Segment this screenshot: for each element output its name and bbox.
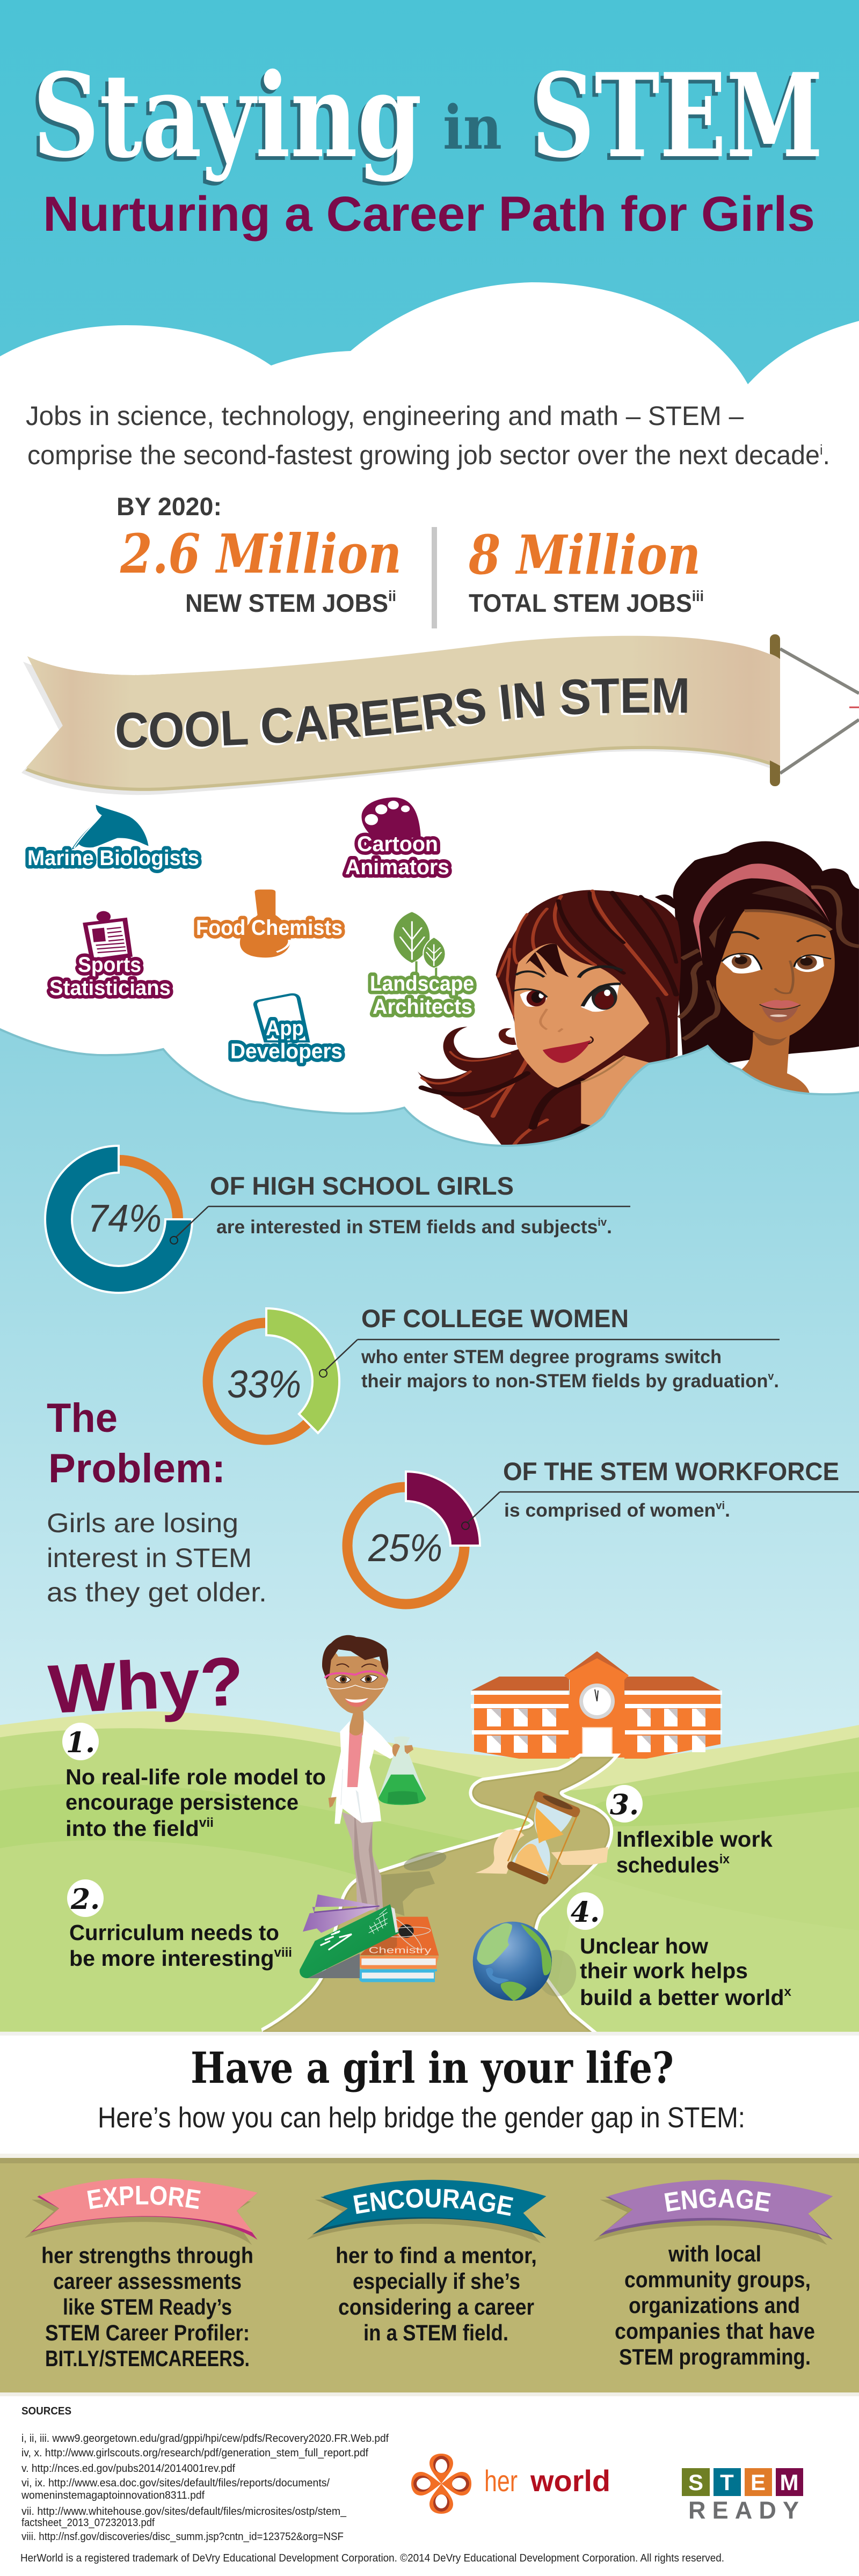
reason 3: 3. bbox=[610, 1789, 639, 1821]
reason 2: viii bbox=[274, 1945, 292, 1960]
donut chart 25: 25% bbox=[368, 1527, 442, 1570]
ribbon: explore bbox=[25, 2178, 258, 2245]
explore text: her strengths through bbox=[41, 2243, 253, 2268]
ribbon: engage bbox=[594, 2180, 833, 2245]
ribbon: encourage: ENCOURAGE bbox=[353, 2189, 513, 2216]
engage text: companies that have bbox=[615, 2318, 815, 2344]
reason 1: vii bbox=[199, 1816, 214, 1830]
ribbon: encourage bbox=[307, 2180, 547, 2243]
illustration: two girls bbox=[418, 841, 859, 1148]
label: landscape architects: Architects bbox=[373, 995, 472, 1019]
illustration: books and paper plane: Chemistry bbox=[369, 1945, 432, 1955]
stat: 33 percent bbox=[208, 1304, 780, 1440]
stat: 33 percent: OF COLLEGE WOMEN bbox=[361, 1304, 629, 1333]
reason 2: 2. bbox=[70, 1883, 100, 1916]
stat: 74 percent bbox=[45, 1146, 630, 1293]
icon: film reel bbox=[361, 797, 421, 843]
icon: globe bbox=[473, 1922, 552, 2001]
engage text: organizations and bbox=[629, 2293, 800, 2318]
icon: phone bbox=[255, 994, 308, 1041]
stat: 74 percent: are interested in STEM fields and subjects bbox=[216, 1217, 593, 1238]
explore text: STEM Career Profiler: bbox=[45, 2320, 250, 2345]
logo: her world: world bbox=[530, 2464, 610, 2498]
title: in bbox=[443, 93, 502, 163]
job stats: 8 Million bbox=[468, 523, 701, 587]
reason 3: Inflexible work bbox=[616, 1827, 773, 1851]
logo: stem ready: E bbox=[751, 2470, 766, 2495]
label: landscape architects: Landscape bbox=[370, 972, 474, 996]
heading: why: Why? bbox=[47, 1643, 245, 1728]
donut chart 25 bbox=[347, 1472, 859, 1604]
explore text: career assessments bbox=[53, 2268, 242, 2294]
engage text: with local bbox=[668, 2241, 761, 2266]
call to action panel bbox=[0, 2032, 859, 2394]
label: cartoon animators: Animators bbox=[345, 855, 449, 879]
ribbon: explore: EXPLORE bbox=[87, 2186, 201, 2209]
sources: vii. http://www.whitehouse.gov/sites/default/files/microsites/ostp/stem_ bbox=[21, 2506, 347, 2518]
heading: the problem bbox=[47, 1395, 225, 1491]
job stats: BY 2020: bbox=[117, 492, 222, 521]
ribbon: engage: ENGAGE bbox=[665, 2189, 771, 2212]
reason 2: be more interesting bbox=[69, 1946, 273, 1971]
encourage text: considering a career bbox=[338, 2294, 534, 2319]
sources: iv, x. http://www.girlscouts.org/research/pdf/generation_stem_full_report.pdf bbox=[21, 2447, 368, 2459]
stat: 74 percent: . bbox=[607, 1217, 612, 1238]
job stats: ii bbox=[388, 588, 396, 604]
sources bbox=[21, 2405, 389, 2543]
heading: the problem: The bbox=[47, 1395, 118, 1441]
encourage text: in a STEM field. bbox=[363, 2320, 508, 2345]
reason 4: 4. bbox=[571, 1896, 600, 1929]
reason 4: build a better world bbox=[580, 1985, 783, 2010]
encourage text: her to find a mentor, bbox=[336, 2243, 537, 2268]
clock bbox=[579, 1684, 615, 1719]
engage text bbox=[615, 2241, 815, 2369]
job stats: 2.6 Million bbox=[120, 522, 402, 586]
intro text: comprise the second-fastest growing job sector over the next decade bbox=[27, 440, 847, 470]
job stats bbox=[117, 492, 704, 628]
problem statement: Girls are losing bbox=[47, 1508, 238, 1538]
problem statement bbox=[47, 1508, 267, 1607]
stat: 25 percent: is comprised of women bbox=[504, 1500, 713, 1521]
stat: 33 percent: their majors to non-STEM fields by graduation bbox=[361, 1371, 774, 1392]
problem statement: as they get older. bbox=[47, 1577, 267, 1607]
sources: factsheet_2013_07232013.pdf bbox=[21, 2517, 155, 2529]
reason 3: schedules bbox=[616, 1853, 724, 1877]
title bbox=[33, 48, 823, 184]
stat: 25 percent: OF THE STEM WORKFORCE bbox=[503, 1457, 839, 1485]
job stats: TOTAL STEM JOBS bbox=[469, 589, 703, 617]
stat: 74 percent: iv bbox=[598, 1217, 607, 1228]
problem statement: interest in STEM bbox=[47, 1543, 252, 1573]
reason 4: x bbox=[784, 1985, 792, 1999]
explore text bbox=[41, 2243, 253, 2371]
landscape: hills bbox=[0, 1711, 859, 2032]
olive band bbox=[0, 2154, 859, 2396]
reason 2 bbox=[67, 1879, 292, 1971]
logo: stem ready bbox=[682, 2468, 803, 2524]
intro text: Jobs in science, technology, engineering and math – STEM – bbox=[26, 401, 744, 431]
stat: 74 percent: OF HIGH SCHOOL GIRLS bbox=[210, 1172, 514, 1200]
label: sports statisticians: Sports bbox=[78, 953, 141, 977]
icon: flask bbox=[240, 889, 291, 957]
explore text: like STEM Ready’s bbox=[63, 2294, 232, 2319]
job stats: iii bbox=[692, 588, 704, 604]
job stats: NEW STEM JOBS bbox=[185, 589, 397, 617]
intro text bbox=[26, 401, 830, 470]
donut chart 33: 33% bbox=[227, 1363, 301, 1406]
encourage text bbox=[336, 2243, 537, 2345]
illustration: hourglass and paper scroll bbox=[475, 1790, 608, 1886]
donut chart 33 bbox=[208, 1308, 780, 1440]
reason 1 bbox=[62, 1723, 326, 1841]
logo: stem ready: READY bbox=[688, 2497, 799, 2524]
reason 4 bbox=[567, 1892, 792, 2010]
reason 1: No real-life role model to bbox=[65, 1765, 326, 1789]
icon: dolphin bbox=[71, 805, 149, 850]
label: landscape architects bbox=[370, 972, 474, 1019]
call to action panel: Have a girl in your life? bbox=[191, 2043, 674, 2093]
encourage text: especially if she’s bbox=[353, 2268, 520, 2294]
stat: 25 percent: . bbox=[725, 1500, 730, 1521]
donut chart 74 bbox=[45, 1146, 630, 1293]
stat: 25 percent: vi bbox=[716, 1500, 725, 1512]
reason 4: their work helps bbox=[580, 1958, 748, 1983]
logo: stem ready: S bbox=[688, 2470, 703, 2495]
illustration: scientist bbox=[322, 1635, 426, 1911]
reason 3 bbox=[606, 1785, 773, 1877]
logo: stem ready: M bbox=[780, 2470, 799, 2495]
logo: her world bbox=[411, 2454, 610, 2514]
label: sports statisticians: Statisticians bbox=[49, 976, 171, 1000]
donut chart 74: 74% bbox=[88, 1197, 162, 1240]
trademark line: HerWorld is a registered trademark of DeVry Educational Development Corporation. ©2014 DeVry Educational Development Corporation. All rights reserved. bbox=[20, 2552, 724, 2564]
intro text: . bbox=[823, 440, 830, 470]
label: sports statisticians bbox=[49, 953, 171, 1000]
call to action panel: Here’s how you can help bridge the gender gap in STEM: bbox=[98, 2102, 745, 2134]
label: marine biologists: Marine Biologists bbox=[27, 846, 199, 870]
heading: the problem: Problem: bbox=[48, 1446, 225, 1491]
sources: v. http://nces.ed.gov/pubs2014/2014001rev.pdf bbox=[21, 2463, 235, 2475]
sources: vi, ix. http://www.esa.doc.gov/sites/default/files/reports/documents/ bbox=[21, 2477, 330, 2489]
stat: 33 percent: who enter STEM degree programs switch bbox=[361, 1346, 722, 1367]
reason 1: encourage persistence bbox=[65, 1790, 299, 1814]
label: app developers: Developers bbox=[230, 1040, 343, 1063]
sources: viii. http://nsf.gov/discoveries/disc_summ.jsp?cntn_id=123752&org=NSF bbox=[21, 2531, 344, 2543]
label: cartoon animators bbox=[345, 832, 449, 879]
girl with auburn hair bbox=[418, 890, 681, 1148]
subtitle: Nurturing a Career Path for Girls bbox=[43, 187, 815, 241]
icon: clipboard bbox=[83, 911, 133, 962]
icon: trees bbox=[394, 912, 446, 977]
banner: cool careers: COOL CAREERS IN STEM bbox=[115, 678, 687, 750]
label: app developers: App bbox=[266, 1016, 304, 1040]
reason 1: 1. bbox=[66, 1726, 95, 1759]
winding road bbox=[263, 1758, 612, 2032]
banner: cool careers bbox=[21, 634, 859, 795]
reason 1: into the field bbox=[65, 1816, 196, 1841]
stat: 33 percent: . bbox=[774, 1371, 779, 1392]
label: cartoon animators: Cartoon bbox=[357, 832, 438, 856]
logo: her world: her bbox=[484, 2464, 518, 2498]
logo: stem ready: T bbox=[720, 2470, 734, 2495]
sources: SOURCES bbox=[21, 2405, 71, 2417]
school building bbox=[471, 1651, 722, 1759]
girl with headband bbox=[655, 841, 859, 1095]
sources: i, ii, iii. www9.georgetown.edu/grad/gppi/hpi/cew/pdfs/Recovery2020.FR.Web.pdf bbox=[21, 2433, 389, 2445]
engage text: STEM programming. bbox=[619, 2344, 811, 2369]
reason 2: Curriculum needs to bbox=[69, 1920, 279, 1945]
reason 3: ix bbox=[719, 1852, 730, 1867]
reason 4: Unclear how bbox=[580, 1934, 708, 1958]
explore text: BIT.LY/STEMCAREERS. bbox=[45, 2346, 250, 2371]
illustration: books and paper plane bbox=[300, 1894, 439, 1982]
stat: 33 percent: v bbox=[768, 1371, 774, 1382]
intro text: i bbox=[820, 442, 823, 458]
blue section with cloud edge bbox=[0, 1026, 859, 1825]
flask bbox=[378, 1736, 426, 1805]
stat: 25 percent bbox=[347, 1457, 859, 1604]
sources: womeninstemagaptoinnovation8311.pdf bbox=[21, 2490, 205, 2501]
title: Staying bbox=[33, 48, 422, 184]
label: app developers bbox=[230, 1016, 343, 1063]
engage text: community groups, bbox=[624, 2267, 811, 2292]
header sky with cloud edge bbox=[0, 0, 859, 384]
label: food chemists: Food Chemists bbox=[196, 916, 343, 940]
